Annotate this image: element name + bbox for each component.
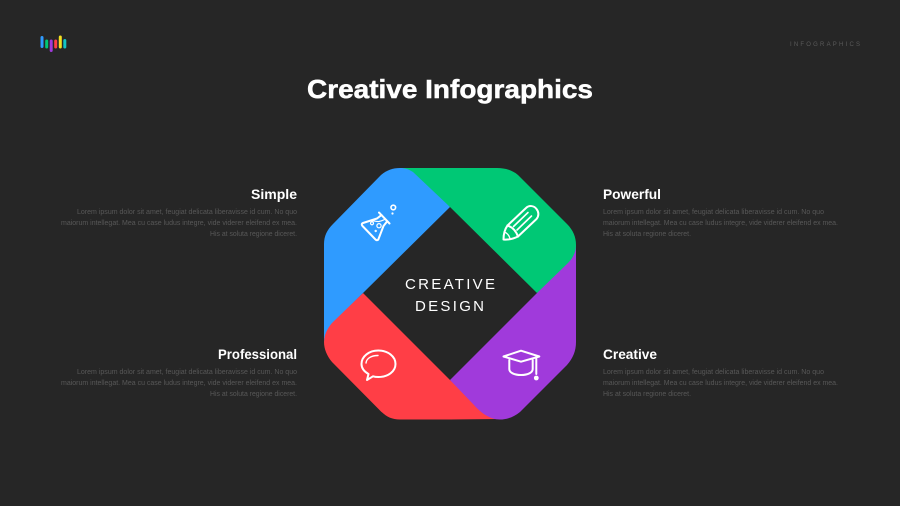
icon: pencil	[504, 206, 538, 240]
center label	[405, 276, 495, 315]
text block: Creative	[603, 346, 838, 398]
icon: flask	[362, 205, 396, 240]
center label: DESIGN	[415, 298, 484, 315]
segment: green	[400, 168, 576, 293]
body: Simple: Lorem ipsum dolor sit amet, feugiat delicata liberavisse id cum. No quo	[77, 209, 297, 216]
body: Powerful	[603, 209, 838, 238]
body: Powerful: maiorum intellegat. Mea cu case ludus integre, vide viderer eleifend ex mea.	[603, 220, 838, 227]
body: Professional: maiorum intellegat. Mea cu case ludus integre, vide viderer eleifend ex mea.	[61, 380, 297, 387]
text block: Simple	[61, 186, 297, 238]
body: Professional: His at soluta regione diceret.	[210, 391, 297, 398]
text block: Professional	[61, 346, 297, 398]
body: Powerful: Lorem ipsum dolor sit amet, feugiat delicata liberavisse id cum. No quo	[603, 209, 824, 216]
heading: Simple: Simple	[251, 186, 297, 202]
body: Creative: Lorem ipsum dolor sit amet, feugiat delicata liberavisse id cum. No quo	[603, 369, 824, 376]
segment: purple	[450, 245, 576, 420]
body: Creative	[603, 369, 838, 398]
text block: Powerful	[603, 186, 838, 238]
icon: graduation cap	[504, 351, 539, 380]
icon: speech bubble	[362, 350, 396, 380]
header label: INFOGRAPHICS	[790, 42, 860, 48]
segment: red	[324, 293, 500, 420]
body: Professional: Lorem ipsum dolor sit amet, feugiat delicata liberavisse id cum. No quo	[77, 369, 297, 376]
heading: Powerful: Powerful	[603, 186, 661, 202]
body: Simple	[61, 209, 297, 238]
logo	[42, 37, 65, 50]
body: Simple: His at soluta regione diceret.	[210, 231, 297, 238]
heading: Creative: Creative	[603, 346, 657, 362]
body: Simple: maiorum intellegat. Mea cu case ludus integre, vide viderer eleifend ex mea.	[61, 220, 297, 227]
heading: Professional: Professional	[218, 346, 297, 362]
title: Creative Infographics	[307, 74, 593, 104]
octagon diagram	[324, 168, 576, 420]
center label: CREATIVE	[405, 276, 495, 293]
body: Creative: His at soluta regione diceret.	[603, 391, 691, 398]
body: Creative: maiorum intellegat. Mea cu case ludus integre, vide viderer eleifend ex mea.	[603, 380, 838, 387]
body: Professional	[61, 369, 297, 398]
body: Powerful: His at soluta regione diceret.	[603, 231, 691, 238]
segment: blue	[324, 168, 450, 343]
